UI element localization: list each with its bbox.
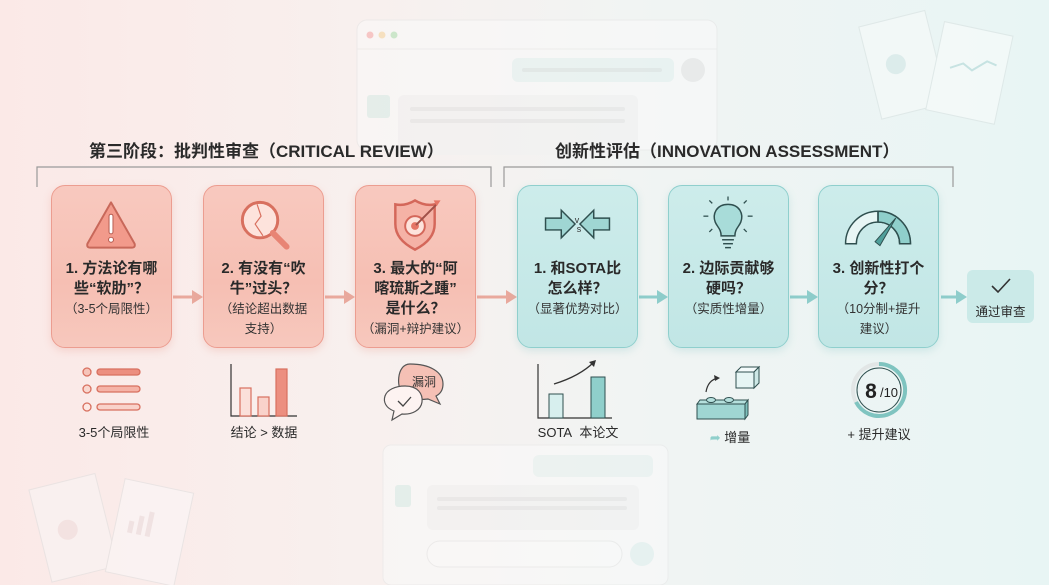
card 5: marginal contribution: 2. 边际贡献够 — [683, 260, 774, 277]
card 6: innovation score: 建议） — [860, 322, 897, 336]
icon: lightbulb — [703, 196, 753, 248]
label: increment: ➦ 增量 — [710, 430, 750, 445]
card 5: marginal contribution: 硬吗？ — [706, 280, 751, 297]
icon: vs arrows: v — [575, 215, 580, 225]
icon: magnifier — [240, 200, 290, 250]
label: conclusion > data: 结论 > 数据 — [231, 425, 297, 440]
card 5: marginal contribution: （实质性增量） — [685, 302, 772, 316]
icon: sota chart — [538, 364, 612, 418]
bottom icons: 漏洞 — [412, 373, 436, 390]
card 1: methodology weaknesses — [51, 185, 172, 348]
bottom icons: /10 — [880, 385, 898, 400]
card 3: achilles heel: 喀琉斯之踵” — [374, 280, 457, 297]
card 3: achilles heel — [355, 185, 476, 348]
brackets — [37, 167, 491, 187]
card 2: overclaiming: 2. 有没有“吹 — [221, 260, 306, 277]
icon: score ring — [853, 364, 905, 416]
final box: pass review: 通过审查 — [975, 305, 1026, 319]
label: improvement suggestions: + 提升建议 — [847, 427, 911, 442]
bottom icons: 8 — [865, 380, 877, 403]
icon: gauge — [844, 210, 912, 246]
icon: blocks — [697, 400, 748, 404]
card 4: vs SOTA: 1. 和SOTA比 — [534, 260, 621, 277]
card 6: innovation score: （10分制+提升 — [837, 302, 920, 316]
card 2: overclaiming: 支持） — [245, 322, 282, 336]
card 6: innovation score — [818, 185, 939, 348]
icon: warning — [86, 201, 136, 249]
card 3: achilles heel: 是什么？ — [385, 300, 446, 317]
card 2: overclaiming: （结论超出数据 — [220, 302, 307, 316]
bottom icons — [82, 360, 908, 422]
card 1: methodology weaknesses: 些“软肋”？ — [74, 280, 149, 297]
label: limitations: 3-5个局限性 — [79, 425, 149, 440]
card 2: overclaiming: 牛”过头？ — [230, 280, 297, 297]
card 4: vs SOTA — [517, 185, 638, 348]
icon: vs arrows — [544, 208, 610, 240]
card 1: methodology weaknesses: （3-5个局限性） — [65, 302, 158, 316]
icon: bar chart — [231, 364, 297, 416]
icon: list — [83, 368, 140, 411]
arrows — [173, 290, 967, 304]
heading: critical review: 第三阶段：批判性审查（CRITICAL REVIEW） — [89, 142, 444, 161]
card 3: achilles heel: （漏洞+辩护建议） — [362, 322, 469, 336]
icon: shield target — [394, 199, 440, 251]
label: sota vs paper: SOTA 本论文 — [538, 425, 618, 440]
card 6: innovation score: 分？ — [863, 280, 894, 297]
final box: pass review — [967, 270, 1034, 323]
icon: vs arrows: s — [577, 224, 582, 234]
card 4: vs SOTA: （显著优势对比） — [527, 302, 628, 316]
card 3: achilles heel: 3. 最大的“阿 — [373, 260, 458, 277]
card 5: marginal contribution — [668, 185, 789, 348]
card 4: vs SOTA: 怎么样？ — [547, 280, 608, 297]
card 6: innovation score: 3. 创新性打个 — [833, 260, 924, 277]
card 2: overclaiming — [203, 185, 324, 348]
card 1: methodology weaknesses: 1. 方法论有哪 — [66, 260, 157, 277]
heading: innovation assessment: 创新性评估（INNOVATION ASSESSMENT） — [555, 142, 899, 161]
icon: speech bubbles — [399, 364, 443, 404]
